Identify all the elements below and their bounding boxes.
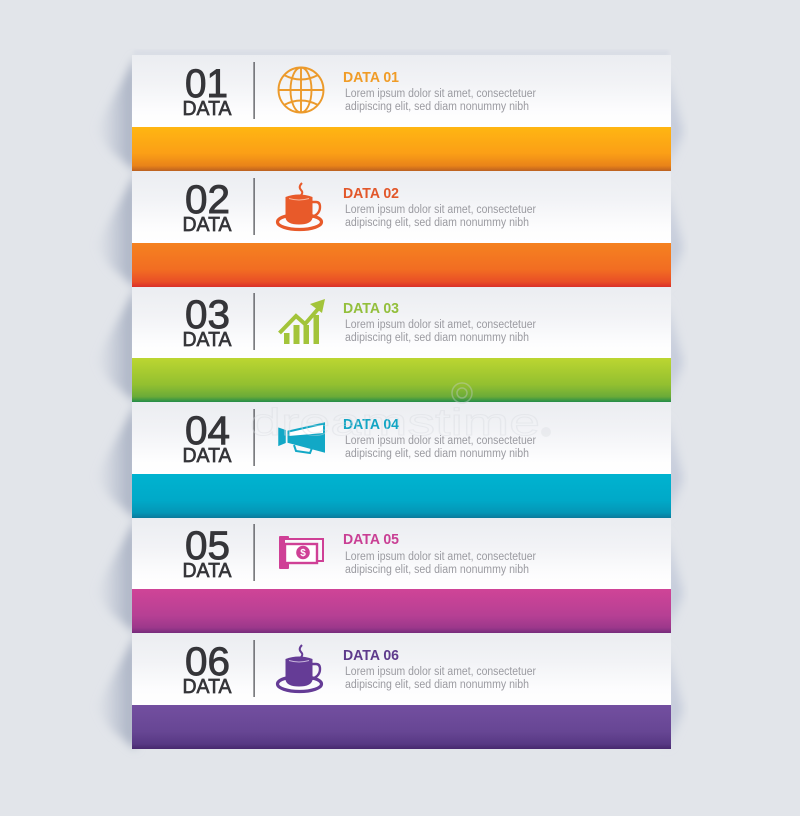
- text block: adipiscing elit, sed diam nonummy nibh: [345, 332, 529, 344]
- label DATA: DATA: [182, 560, 232, 582]
- text block: Lorem ipsum dolor sit amet, consectetuer: [345, 435, 536, 447]
- label DATA: DATA: [182, 98, 232, 120]
- number 05: 05: [185, 524, 230, 568]
- text block: [345, 319, 536, 344]
- icon: money: $: [300, 548, 306, 559]
- heading: DATA 04: [343, 416, 400, 433]
- number 06: 06: [185, 640, 230, 684]
- label DATA: DATA: [182, 676, 232, 698]
- divider: [254, 293, 255, 350]
- colour band 6: [132, 705, 671, 749]
- white panel 5: [132, 518, 671, 590]
- row 3: [132, 287, 671, 402]
- divider: [254, 62, 255, 119]
- text block: [345, 88, 536, 113]
- row 2: [132, 171, 671, 287]
- text block: adipiscing elit, sed diam nonummy nibh: [345, 101, 529, 113]
- text block: Lorem ipsum dolor sit amet, consectetuer: [345, 319, 536, 331]
- row 5: [132, 518, 671, 633]
- top edge shadow: [134, 50, 669, 57]
- white panel 1: [132, 55, 671, 127]
- colour band 5: [132, 589, 671, 633]
- white panel 6: [132, 633, 671, 705]
- white panel 2: [132, 171, 671, 243]
- heading: DATA 02: [343, 185, 399, 202]
- colour band 4: [132, 474, 671, 518]
- number 04: 04: [185, 409, 230, 453]
- colour band 2: [132, 243, 671, 287]
- text block: Lorem ipsum dolor sit amet, consectetuer: [345, 204, 536, 216]
- text block: adipiscing elit, sed diam nonummy nibh: [345, 448, 529, 460]
- text block: [345, 435, 536, 460]
- row 6: [132, 633, 671, 749]
- icon: coffee cup: [278, 645, 322, 692]
- white panel 4: [132, 402, 671, 474]
- number 01: 01: [185, 62, 228, 106]
- icon: globe: [278, 68, 324, 112]
- divider: [254, 409, 255, 466]
- left fold shadows: [96, 56, 136, 750]
- icon: coffee cup: [278, 183, 322, 230]
- text block: Lorem ipsum dolor sit amet, consectetuer: [345, 88, 536, 100]
- number 03: 03: [185, 293, 230, 337]
- row 4: [132, 402, 671, 518]
- heading: DATA 01: [343, 69, 399, 86]
- divider: [254, 524, 255, 581]
- label DATA: DATA: [182, 214, 232, 236]
- heading: DATA 06: [343, 647, 399, 664]
- text block: adipiscing elit, sed diam nonummy nibh: [345, 217, 529, 229]
- text block: [345, 666, 536, 691]
- icon: megaphone: [279, 424, 324, 453]
- text block: Lorem ipsum dolor sit amet, consectetuer: [345, 666, 536, 678]
- icon: money: [279, 536, 323, 569]
- row 1: [132, 55, 671, 171]
- right fold shadows: [666, 70, 683, 748]
- text block: Lorem ipsum dolor sit amet, consectetuer: [345, 551, 536, 563]
- divider: [254, 178, 255, 235]
- colour band 3: [132, 358, 671, 402]
- text block: [345, 551, 536, 576]
- watermark: [250, 383, 551, 444]
- heading: DATA 05: [343, 531, 399, 548]
- number 02: 02: [185, 178, 230, 222]
- text block: adipiscing elit, sed diam nonummy nibh: [345, 564, 529, 576]
- text block: [345, 204, 536, 229]
- label DATA: DATA: [182, 445, 232, 467]
- colour band 1: [132, 127, 671, 171]
- divider: [254, 640, 255, 697]
- text block: adipiscing elit, sed diam nonummy nibh: [345, 679, 529, 691]
- white panel 3: [132, 287, 671, 359]
- label DATA: DATA: [182, 329, 232, 351]
- heading: DATA 03: [343, 300, 399, 317]
- watermark: dreamstime: [250, 402, 540, 444]
- icon: growth chart: [280, 299, 325, 344]
